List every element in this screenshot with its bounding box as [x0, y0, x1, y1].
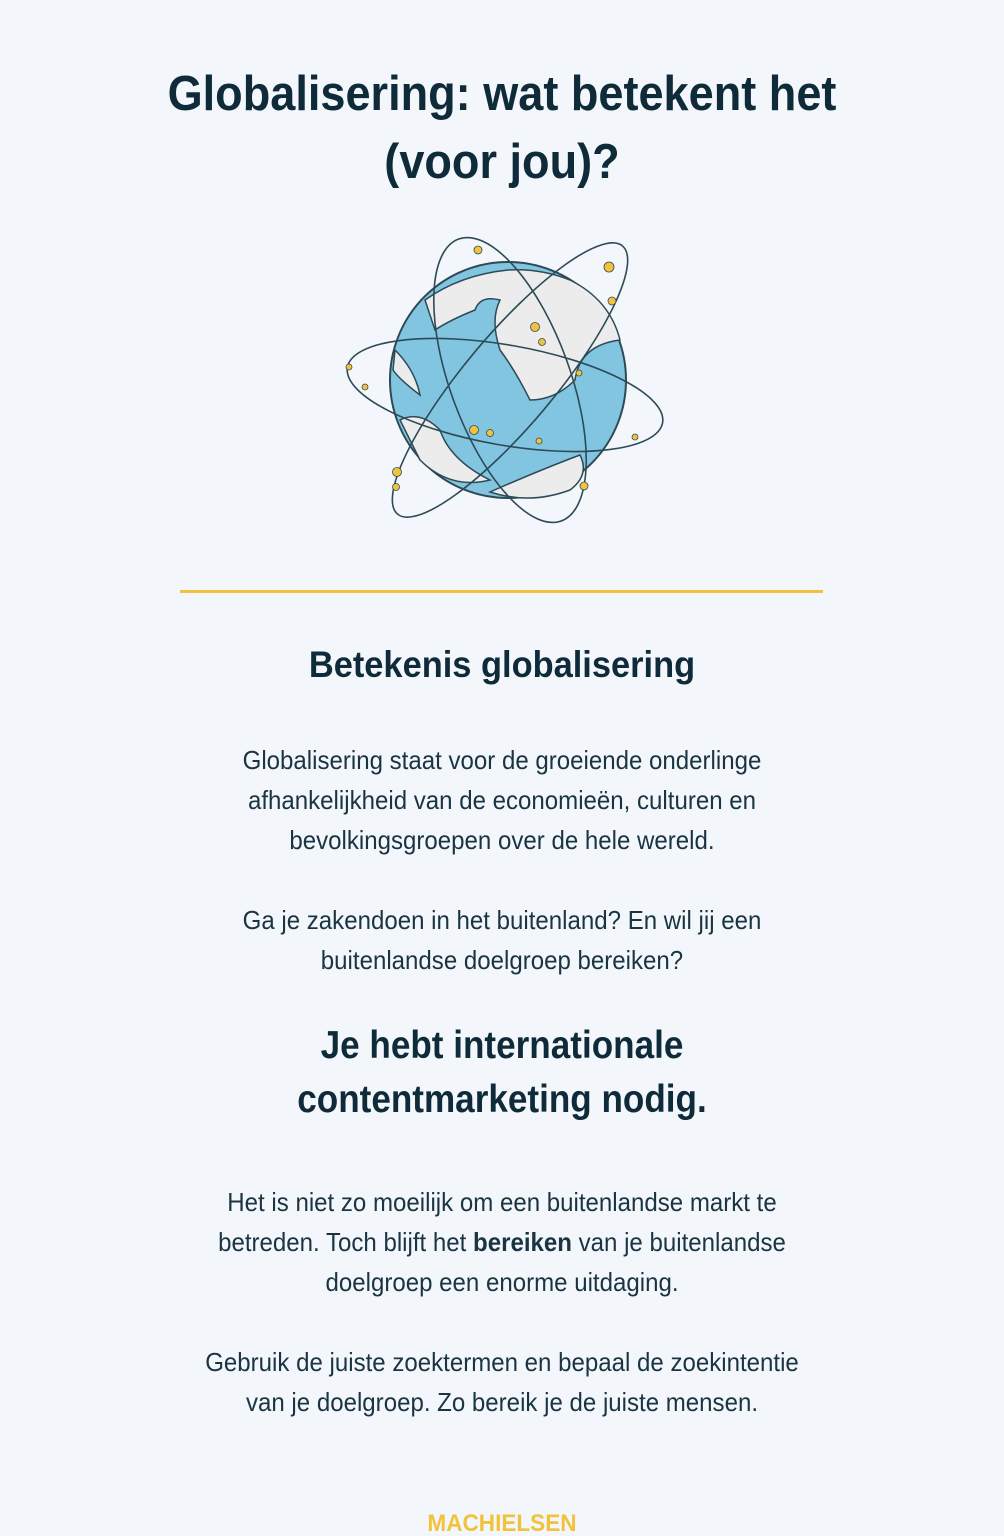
- text block: question: [243, 905, 761, 975]
- heading: contentmarketing: [297, 1024, 707, 1121]
- text block: challenge: Het is niet zo moeilijk om een buitenlandse markt te: [227, 1187, 777, 1217]
- text block: question: Ga je zakendoen in het buitenland? En wil jij een: [243, 905, 761, 935]
- text block: challenge: doelgroep een enorme uitdaging.: [325, 1267, 679, 1297]
- heading: Betekenis globalisering: Betekenis globalisering: [309, 644, 695, 685]
- icon: globe with orbits: [346, 236, 664, 524]
- text block: definition: [243, 745, 761, 855]
- heading: contentmarketing: Je hebt internationale: [321, 1024, 683, 1067]
- text block: challenge: betreden. Toch blijft het bereiken van je buitenlandse: [218, 1227, 786, 1257]
- divider line: [180, 590, 823, 593]
- text block: advice: van je doelgroep. Zo bereik je de juiste mensen.: [246, 1387, 758, 1417]
- title: [168, 67, 836, 189]
- text block: advice: [205, 1347, 799, 1417]
- title: Globalisering: wat betekent het: [168, 67, 836, 121]
- title: (voor jou)?: [384, 135, 620, 189]
- text block: definition: Globalisering staat voor de groeiende onderlinge: [243, 745, 761, 775]
- heading: contentmarketing: contentmarketing nodig.: [297, 1078, 707, 1121]
- text block: definition: afhankelijkheid van de economieën, culturen en: [248, 785, 756, 815]
- text block: definition: bevolkingsgroepen over de hele wereld.: [289, 825, 715, 855]
- text block: question: buitenlandse doelgroep bereiken?: [321, 945, 683, 975]
- text block: challenge: [218, 1187, 786, 1297]
- text block: advice: Gebruik de juiste zoektermen en bepaal de zoekintentie: [205, 1347, 799, 1377]
